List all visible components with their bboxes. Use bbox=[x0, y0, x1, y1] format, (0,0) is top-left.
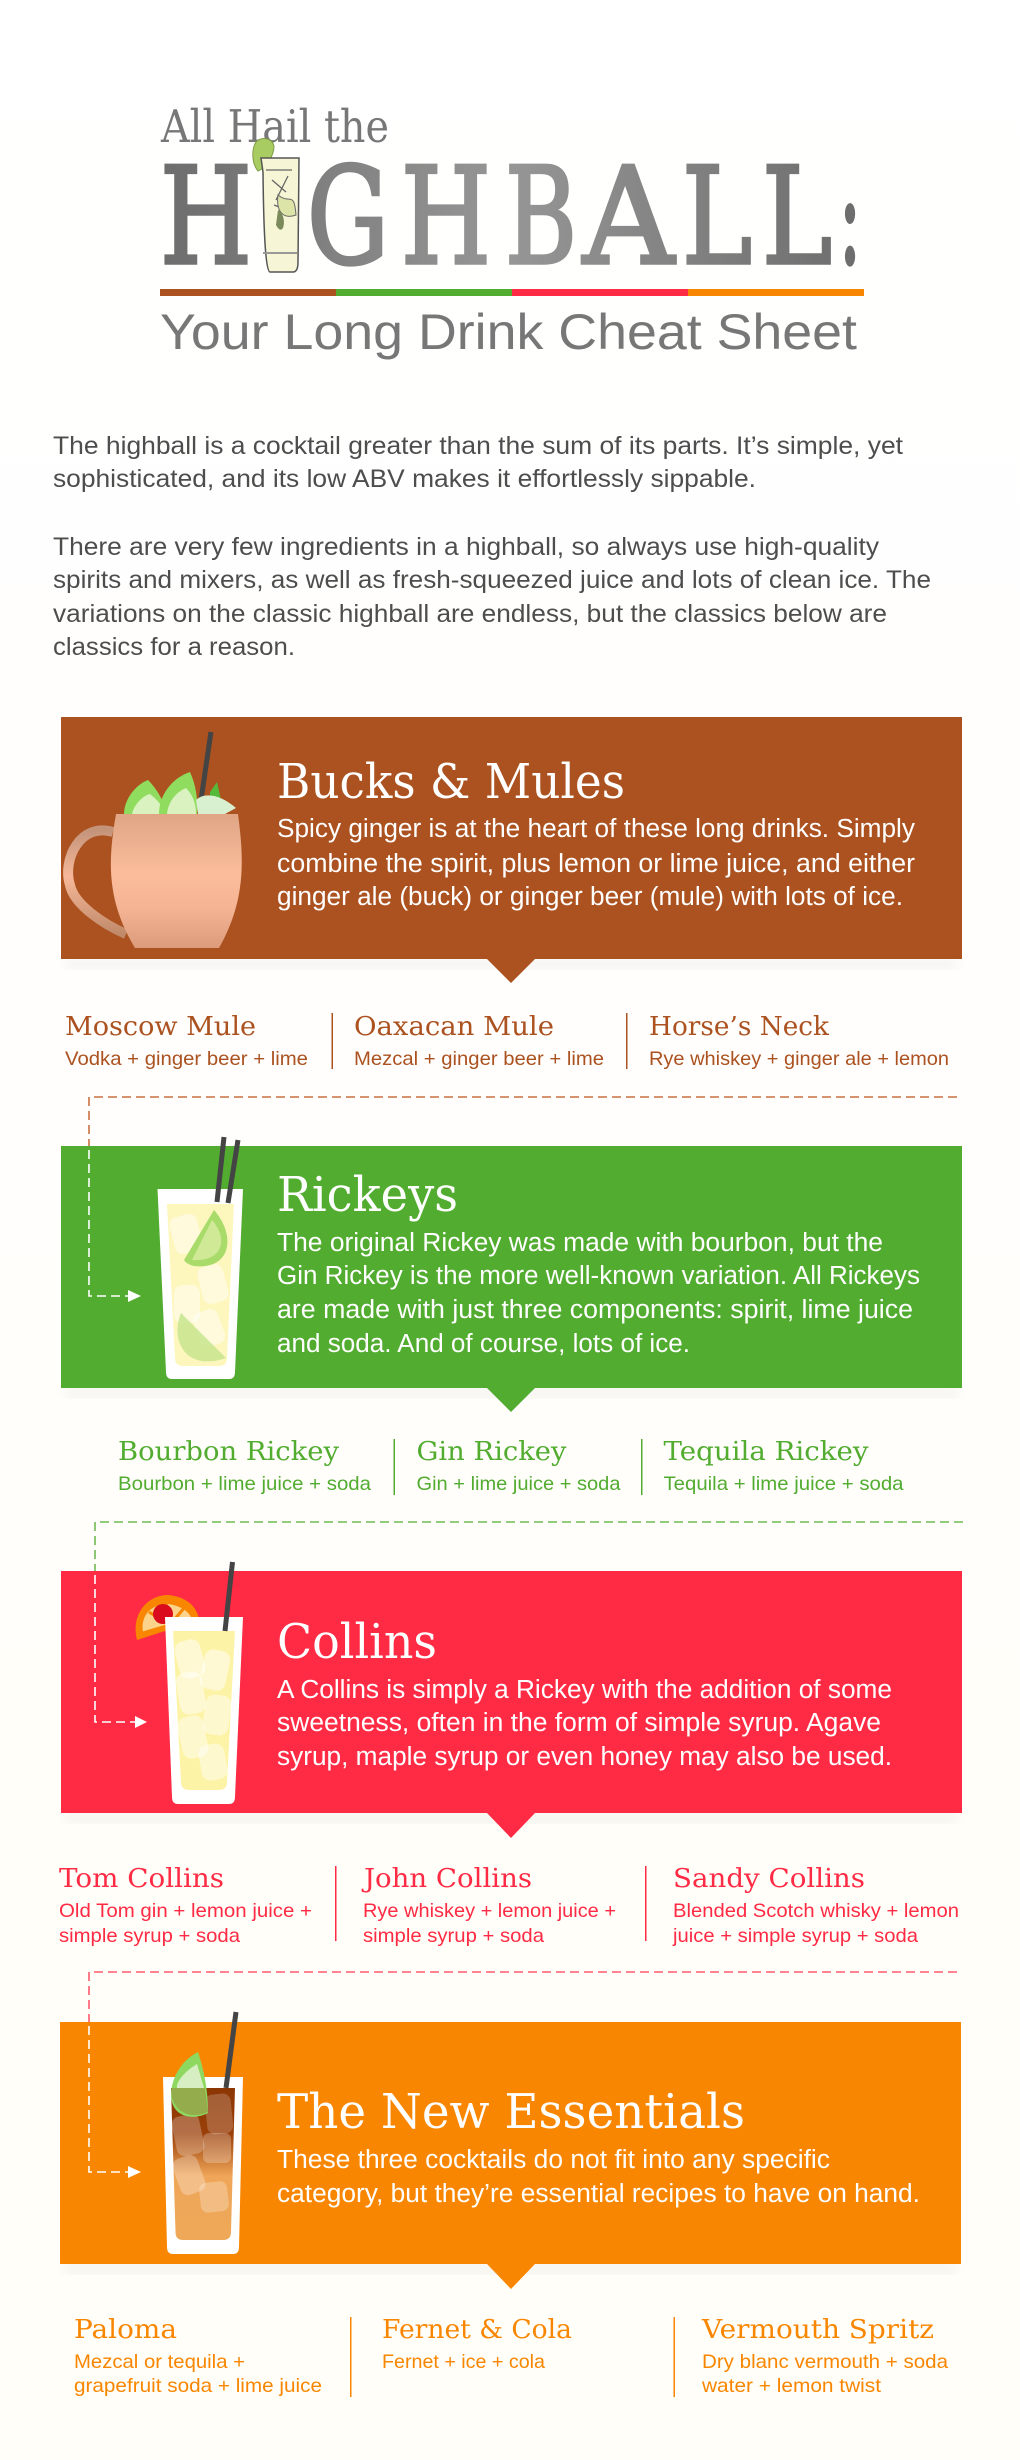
arrow: rickeys to collins bbox=[95, 1522, 963, 1728]
description: and soda. And of course, lots of ice. bbox=[277, 1330, 690, 1358]
panel: Bucks & Mules bbox=[61, 717, 962, 983]
drinks list: Rickeys: Bourbon Rickey bbox=[118, 1437, 339, 1467]
intro text: spirits and mixers, as well as fresh-squeezed juice and lots of clean ice. The bbox=[53, 566, 931, 594]
drinks list: Bucks & Mules: Oaxacan Mule bbox=[354, 1012, 554, 1042]
color rule bbox=[160, 289, 864, 296]
drinks list: Bucks & Mules: Moscow Mule bbox=[65, 1012, 256, 1042]
description: are made with just three components: spirit, lime juice bbox=[277, 1296, 913, 1324]
title block bbox=[160, 100, 861, 295]
drinks list: Collins: juice + simple syrup + soda bbox=[672, 1925, 918, 1947]
infographic: : bbox=[839, 139, 861, 295]
drinks list: The New Essentials: Paloma bbox=[74, 2315, 177, 2345]
panel: Collins bbox=[61, 1562, 962, 1838]
drinks list: Rickeys bbox=[118, 1437, 904, 1495]
intro text: The highball is a cocktail greater than the sum of its parts. It’s simple, yet bbox=[53, 432, 903, 460]
drinks list: Collins: John Collins bbox=[361, 1864, 532, 1894]
drinks list: The New Essentials: water + lemon twist bbox=[701, 2375, 882, 2397]
drinks list: Rickeys: Gin Rickey bbox=[416, 1437, 567, 1467]
drinks list: Bucks & Mules bbox=[65, 1012, 949, 1070]
drinks list: Collins bbox=[59, 1864, 959, 1947]
intro text: There are very few ingredients in a highball, so always use high-quality bbox=[53, 533, 880, 561]
title word: HIGHBALL: L bbox=[682, 139, 752, 295]
description bbox=[277, 1676, 892, 1771]
description: These three cocktails do not fit into any specific bbox=[277, 2146, 830, 2174]
drinks list: Rickeys: Tequila Rickey bbox=[664, 1437, 869, 1467]
title word: HIGHBALL: A bbox=[582, 139, 676, 295]
heading: Bucks & Mules bbox=[277, 754, 625, 810]
title line: All Hail the: All Hail the bbox=[160, 100, 389, 153]
drinks list: The New Essentials: grapefruit soda + lime juice bbox=[74, 2375, 322, 2397]
title word: HIGHBALL: H bbox=[160, 139, 252, 295]
drinks list: Collins: simple syrup + soda bbox=[363, 1925, 544, 1947]
drinks list: Collins: Rye whiskey + lemon juice + bbox=[363, 1900, 616, 1922]
panel: Rickeys bbox=[61, 1137, 962, 1412]
title word: HIGHBALL: H bbox=[401, 139, 491, 295]
drinks list: Collins: Old Tom gin + lemon juice + bbox=[59, 1900, 312, 1922]
description: combine the spirit, plus lemon or lime juice, and either bbox=[277, 850, 916, 878]
description bbox=[277, 815, 916, 911]
heading: The New Essentials bbox=[277, 2084, 745, 2140]
drinks list: Rickeys: Tequila + lime juice + soda bbox=[664, 1473, 904, 1495]
drinks list: Collins: Sandy Collins bbox=[673, 1864, 865, 1894]
drinks list: Collins: Tom Collins bbox=[59, 1864, 224, 1894]
description: Gin Rickey is the more well-known variation. All Rickeys bbox=[277, 1262, 920, 1290]
icon: collins glass with orange bbox=[136, 1562, 243, 1804]
description: The original Rickey was made with bourbon, but the bbox=[277, 1229, 883, 1257]
intro text: classics for a reason. bbox=[53, 633, 295, 661]
title word: HIGHBALL: G bbox=[307, 139, 389, 295]
drinks list: Rickeys: Bourbon + lime juice + soda bbox=[118, 1473, 371, 1495]
icon: highball glass as the letter I bbox=[253, 139, 299, 272]
heading: Collins bbox=[277, 1614, 437, 1670]
title word: HIGHBALL: B bbox=[505, 139, 577, 295]
drinks list: The New Essentials: Fernet & Cola bbox=[382, 2315, 572, 2345]
description: category, but they’re essential recipes to have on hand. bbox=[277, 2180, 920, 2208]
intro text: sophisticated, and its low ABV makes it effortlessly sippable. bbox=[53, 465, 756, 493]
subtitle: Your Long Drink Cheat Sheet bbox=[160, 304, 857, 360]
title word: HIGHBALL: L bbox=[762, 139, 832, 295]
drinks list: The New Essentials: Vermouth Spritz bbox=[701, 2315, 934, 2345]
description bbox=[277, 2146, 920, 2208]
arrow: bucks to rickeys bbox=[89, 1097, 957, 1302]
description: syrup, maple syrup or even honey may also be used. bbox=[277, 1743, 892, 1771]
intro text: variations on the classic highball are endless, but the classics below are bbox=[53, 600, 887, 628]
drinks list: The New Essentials: Dry blanc vermouth + soda bbox=[702, 2351, 948, 2373]
icon: rickey glass bbox=[158, 1137, 243, 1379]
title word: HIGHBALL bbox=[160, 139, 861, 295]
icon: glass with cola and lime bbox=[163, 2012, 243, 2254]
drinks list: The New Essentials: Mezcal or tequila + bbox=[74, 2351, 245, 2373]
description: Spicy ginger is at the heart of these long drinks. Simply bbox=[277, 815, 915, 843]
icon: copper mug bbox=[68, 732, 242, 948]
arrow: collins to new essentials bbox=[89, 1972, 957, 2178]
drinks list: Bucks & Mules: Horse’s Neck bbox=[649, 1012, 829, 1042]
description bbox=[277, 1229, 920, 1358]
drinks list: The New Essentials bbox=[74, 2315, 948, 2397]
description: sweetness, often in the form of simple syrup. Agave bbox=[277, 1709, 881, 1737]
intro text bbox=[53, 432, 931, 661]
description: ginger ale (buck) or ginger beer (mule) with lots of ice. bbox=[277, 883, 903, 911]
drinks list: Bucks & Mules: Rye whiskey + ginger ale + lemon bbox=[649, 1048, 949, 1070]
drinks list: Rickeys: Gin + lime juice + soda bbox=[416, 1473, 621, 1495]
drinks list: Collins: simple syrup + soda bbox=[59, 1925, 240, 1947]
heading: Rickeys bbox=[277, 1167, 458, 1223]
drinks list: Bucks & Mules: Vodka + ginger beer + lime bbox=[65, 1048, 308, 1070]
drinks list: The New Essentials: Fernet + ice + cola bbox=[382, 2351, 545, 2373]
drinks list: Bucks & Mules: Mezcal + ginger beer + lime bbox=[354, 1048, 604, 1070]
description: A Collins is simply a Rickey with the addition of some bbox=[277, 1676, 892, 1704]
drinks list: Collins: Blended Scotch whisky + lemon bbox=[673, 1900, 959, 1922]
panel: The New Essentials bbox=[60, 2012, 961, 2289]
